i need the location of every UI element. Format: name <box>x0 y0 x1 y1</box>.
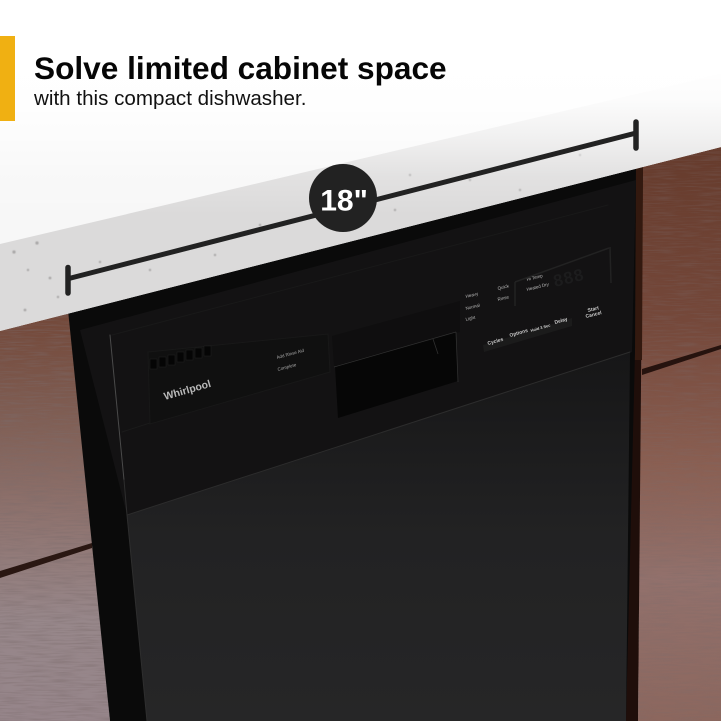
dishwasher: Cancel <box>585 310 603 320</box>
dispenser labels: Complete <box>277 362 297 372</box>
display digits: 888 <box>551 265 586 291</box>
cycle labels: Rinse <box>497 294 510 302</box>
accent bar <box>0 36 15 121</box>
title block <box>33 50 447 110</box>
cycle labels: Hi Temp <box>526 273 544 282</box>
dispenser labels <box>276 348 305 372</box>
control panel <box>80 180 636 515</box>
panel edge highlights <box>110 205 630 721</box>
dark side gap right <box>620 160 643 721</box>
right wood cabinet <box>636 140 721 721</box>
cycle labels <box>465 273 550 322</box>
cycle labels: Heated Dry <box>526 281 550 292</box>
heading: Solve limited cabinet space <box>34 50 447 86</box>
button row <box>483 318 572 352</box>
measurement line <box>67 122 636 293</box>
dishwasher <box>68 160 636 721</box>
cycle labels: Normal <box>465 303 480 311</box>
top white fade <box>302 74 721 191</box>
counter front edge <box>0 74 721 331</box>
dispenser labels: Add Rinse Aid <box>276 348 305 360</box>
wood seam right <box>642 345 721 375</box>
dishwasher: Options <box>509 328 529 339</box>
dishwasher: Delay <box>554 316 569 326</box>
dimension badge: 18" <box>320 184 368 218</box>
display frame <box>515 247 611 306</box>
subheading: with this compact dishwasher. <box>33 87 306 110</box>
dishwasher: Cycles <box>487 337 504 347</box>
counter speckles <box>12 154 581 311</box>
dishwasher: Hold 3 Sec <box>530 322 552 333</box>
cycle labels: Heavy <box>465 291 479 299</box>
body shadow <box>68 160 636 721</box>
cycle labels: Light <box>465 315 476 322</box>
brand logo: Whirlpool <box>163 378 212 403</box>
dimension badge <box>309 164 377 232</box>
cycle labels: Quick <box>497 283 510 291</box>
right tick <box>633 122 639 148</box>
door handle <box>332 301 460 418</box>
wood seam left <box>0 543 92 578</box>
dispenser indicators <box>150 346 211 369</box>
left tick <box>65 268 71 293</box>
door <box>127 352 630 721</box>
counter top surface <box>0 0 721 331</box>
dispenser panel <box>148 334 330 424</box>
dishwasher: Start <box>587 305 600 314</box>
left wood cabinet <box>0 310 115 721</box>
